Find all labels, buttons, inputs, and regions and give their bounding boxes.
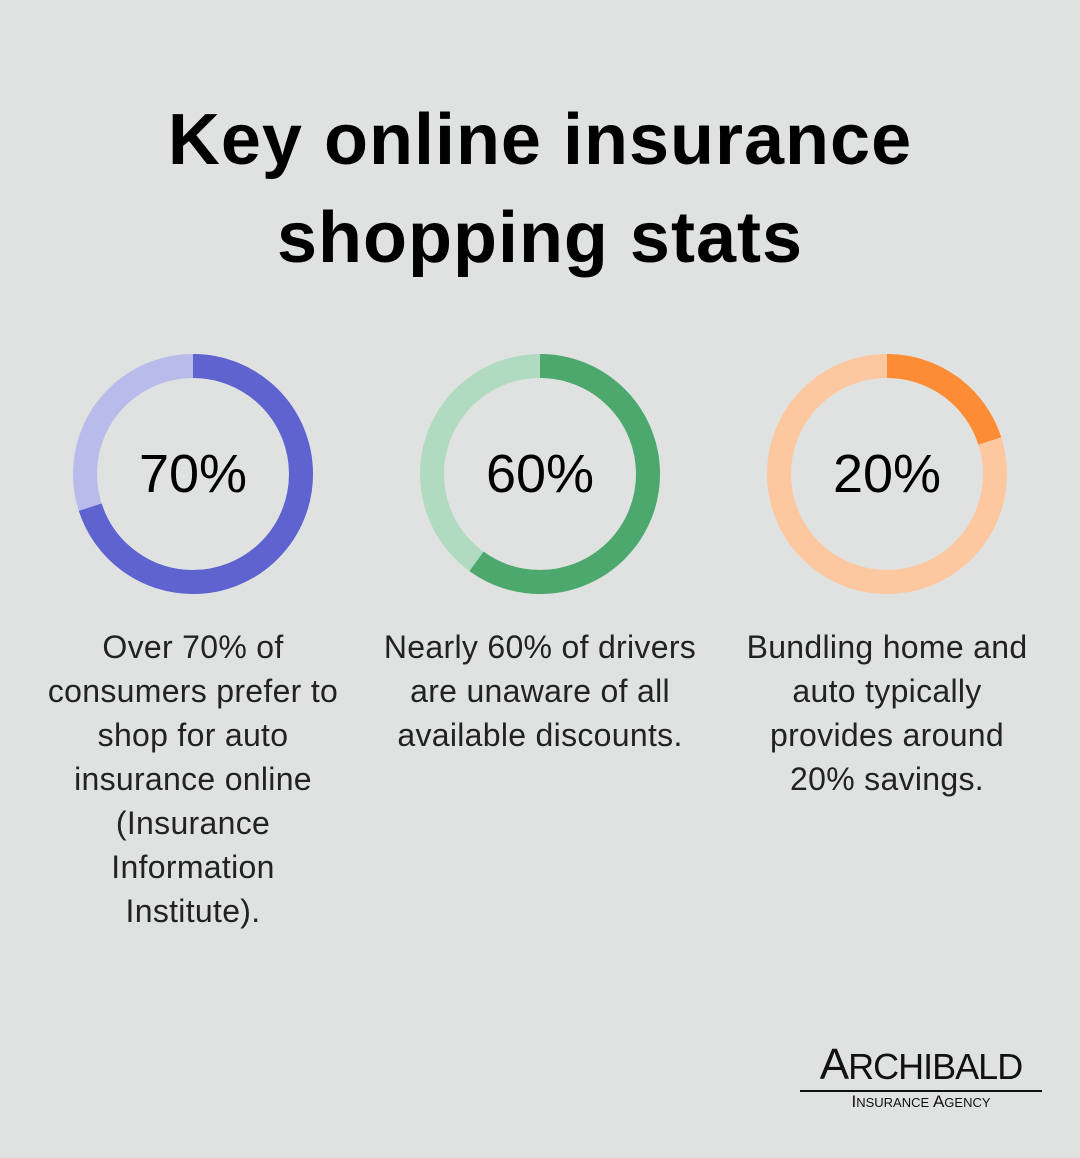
chart: 20% donut: 20% [833, 444, 941, 504]
title: shopping stats [277, 198, 803, 278]
chart: 60% donut [420, 354, 660, 594]
title [168, 100, 912, 278]
text: stat 1: (Insurance [116, 805, 270, 841]
text: stat 3: 20% savings. [790, 761, 984, 797]
text: stat 2: Nearly 60% of drivers [384, 629, 696, 665]
text: stat 1: Over 70% of [102, 629, 284, 665]
text: stat 3: provides around [770, 717, 1004, 753]
logo: INSURANCE AGENCY [851, 1092, 991, 1111]
text: stat 1: shop for auto [98, 717, 288, 753]
logo [800, 1040, 1042, 1111]
chart: 20% donut [767, 354, 1007, 594]
chart: 70% donut: 70% [139, 444, 247, 504]
text: stat 2: available discounts. [397, 717, 683, 753]
logo: ARCHIBALD [820, 1040, 1022, 1089]
text: stat 2 [384, 629, 696, 753]
text: stat 1 [48, 629, 338, 929]
text: stat 1: insurance online [74, 761, 312, 797]
text: stat 1: Information [111, 849, 275, 885]
text: stat 3: auto typically [792, 673, 982, 709]
chart: 60% donut: 60% [486, 444, 594, 504]
text: stat 1: Institute). [126, 893, 260, 929]
text: stat 3 [747, 629, 1027, 797]
text: stat 1: consumers prefer to [48, 673, 338, 709]
chart: 70% donut [73, 354, 313, 594]
title: Key online insurance [168, 100, 912, 180]
text: stat 3: Bundling home and [747, 629, 1027, 665]
text: stat 2: are unaware of all [410, 673, 670, 709]
